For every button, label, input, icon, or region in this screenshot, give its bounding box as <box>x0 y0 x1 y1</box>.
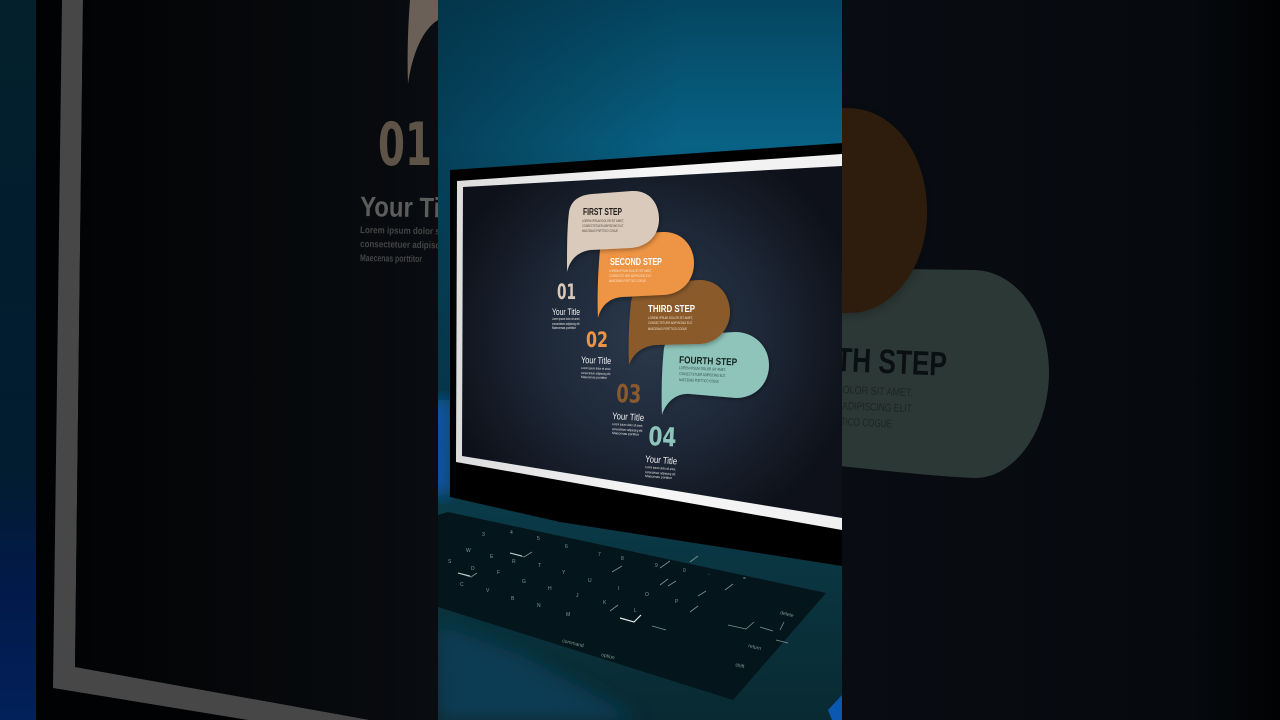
keyboard: E <box>490 554 494 560</box>
keyboard: B <box>511 596 515 602</box>
keyboard: D <box>471 566 475 572</box>
step 01 label: Maecenas porttitor <box>552 326 577 330</box>
bubble: fourth step: CONSECTETUER ADIPISCING ELIT. <box>679 371 726 378</box>
panel: left blurred zoomed backdrop <box>0 0 468 720</box>
step 01 label: Lorem ipsum dolor sit amet, <box>552 317 580 321</box>
panel: right blurred zoomed backdrop <box>842 0 1235 720</box>
step 02 label: Your Title <box>581 355 611 367</box>
bubble: first step: FIRST STEP <box>583 207 622 218</box>
keyboard: return <box>748 643 762 652</box>
keyboard: J <box>576 593 579 599</box>
bubble: second step: LOREM IPSUM DOLOR SIT AMET, <box>609 268 652 273</box>
bubble: enlarged fourth step: FOURTH STEP <box>761 338 948 384</box>
keyboard <box>438 512 826 700</box>
bubble: fourth step: LOREM IPSUM DOLOR SIT AMET, <box>679 365 726 372</box>
keyboard: T <box>538 563 541 569</box>
keyboard: L <box>634 608 637 614</box>
bubble: third step: THIRD STEP <box>648 304 695 315</box>
step 02 label <box>581 328 611 380</box>
bubble: fourth step <box>662 332 769 415</box>
panel: left blurred zoomed backdrop: Lorem ipsum dolor sit amet, <box>360 225 468 238</box>
panel: left blurred zoomed backdrop: consectetuer adipiscing elit. <box>360 239 468 252</box>
bubble: second step: SECOND STEP <box>610 257 662 268</box>
keyboard: M <box>566 612 570 618</box>
keyboard: 7 <box>598 552 601 558</box>
keyboard: 4 <box>510 530 513 536</box>
keyboard: command <box>562 638 584 649</box>
keyboard: C <box>460 582 464 588</box>
step 04 label: Maecenas porttitor <box>645 474 673 480</box>
keyboard: 8 <box>621 556 624 562</box>
bubble: second step <box>598 232 694 318</box>
keyboard: 5 <box>537 536 540 542</box>
keyboard: V <box>486 588 490 594</box>
panel: left blurred zoomed backdrop: 01 <box>378 110 432 180</box>
step 01 label: consectetuer adipiscing elit. <box>552 322 580 326</box>
step 04 label: 04 <box>648 422 677 453</box>
bubble: third step: MAECENAS PORTTICO COGUE <box>648 326 687 331</box>
keyboard: N <box>537 603 541 609</box>
bubble: second step: MAECENAS PORTTICO COGUE <box>609 278 646 283</box>
keyboard: K <box>603 600 607 606</box>
step 03 label <box>612 384 644 436</box>
step 02 label: Lorem ipsum dolor sit amet, <box>581 366 611 371</box>
bubble: third step: CONSECTETUER ADIPISCING ELIT. <box>648 320 693 325</box>
step 04 label: consectetuer adipiscing elit. <box>645 470 676 476</box>
background wall and desk <box>438 0 842 720</box>
keyboard: W <box>466 548 471 554</box>
keyboard: delete <box>780 610 794 619</box>
step 03 label: Your Title <box>612 411 644 424</box>
keyboard: 6 <box>565 544 568 550</box>
bubble: third step <box>629 280 730 365</box>
step 02 label: consectetuer adipiscing elit. <box>581 371 611 376</box>
bubble: second step: CONSECTETUER ADIPISCING ELIT. <box>609 273 652 278</box>
step 03 label: Maecenas porttitor <box>612 431 640 437</box>
step 02 label: Maecenas porttitor <box>581 375 608 380</box>
keyboard: I <box>618 586 619 592</box>
keyboard: 9 <box>655 563 658 569</box>
keyboard: S <box>448 559 452 565</box>
panel: left blurred zoomed backdrop: Maecenas porttitor <box>360 253 422 265</box>
bubble: first step: LOREM IPSUM DOLOR SIT AMET, <box>582 218 624 223</box>
bubble: third step: LOREM IPSUM DOLOR SIT AMET, <box>648 315 693 320</box>
bubble: first step: MAECENAS PORTTICO COGUE <box>582 228 618 233</box>
step 01 label: Your Title <box>552 307 580 318</box>
bubble: enlarged fourth step <box>842 269 1049 478</box>
bubble: fourth step: MAECENAS PORTTICO COGUE <box>679 377 719 384</box>
keyboard: O <box>645 592 649 598</box>
keyboard: = <box>743 576 746 582</box>
step 04 label: Lorem ipsum dolor sit amet, <box>645 465 676 471</box>
keyboard: option <box>601 652 615 661</box>
bubble: enlarged fourth step: MAECENAS PORTTICO COGUE <box>770 413 892 430</box>
keyboard: - <box>708 572 710 578</box>
laptop bezel <box>450 143 842 566</box>
screen area <box>462 166 842 518</box>
step 01 label: 01 <box>557 280 576 304</box>
keyboard: R <box>512 559 516 565</box>
step 01 label <box>552 280 580 330</box>
keyboard: 0 <box>683 568 686 574</box>
bubble: enlarged third step <box>842 108 927 314</box>
bubble: first step <box>567 191 659 272</box>
keyboard: Y <box>562 570 566 576</box>
keyboard: 3 <box>482 532 485 538</box>
panel: left blurred zoomed backdrop: Your Title <box>360 191 468 224</box>
bubble: enlarged fourth step: CONSECTETUER ADIPISCING ELIT. <box>770 397 913 415</box>
keyboard: shift <box>735 662 745 670</box>
bubble: fourth step: FOURTH STEP <box>679 355 738 369</box>
keyboard: P <box>675 599 679 605</box>
keyboard: F <box>497 570 500 576</box>
keyboard: H <box>548 586 552 592</box>
keyboard: G <box>522 579 526 585</box>
panel: center laptop photo <box>428 0 842 720</box>
screen white frame <box>456 154 842 530</box>
step 03 label: consectetuer adipiscing elit. <box>612 427 643 433</box>
step 03 label: Lorem ipsum dolor sit amet, <box>612 422 643 428</box>
step 04 label <box>645 426 677 479</box>
step 02 label: 02 <box>586 328 608 352</box>
keyboard: U <box>588 578 592 584</box>
step 03 label: 03 <box>616 379 642 409</box>
bubble: enlarged fourth step: LOREM IPSUM DOLOR SIT AMET, <box>770 381 913 399</box>
step 04 label: Your Title <box>645 454 678 468</box>
bubble: first step: CONSECTETUER ADIPISCING ELIT. <box>582 223 624 228</box>
